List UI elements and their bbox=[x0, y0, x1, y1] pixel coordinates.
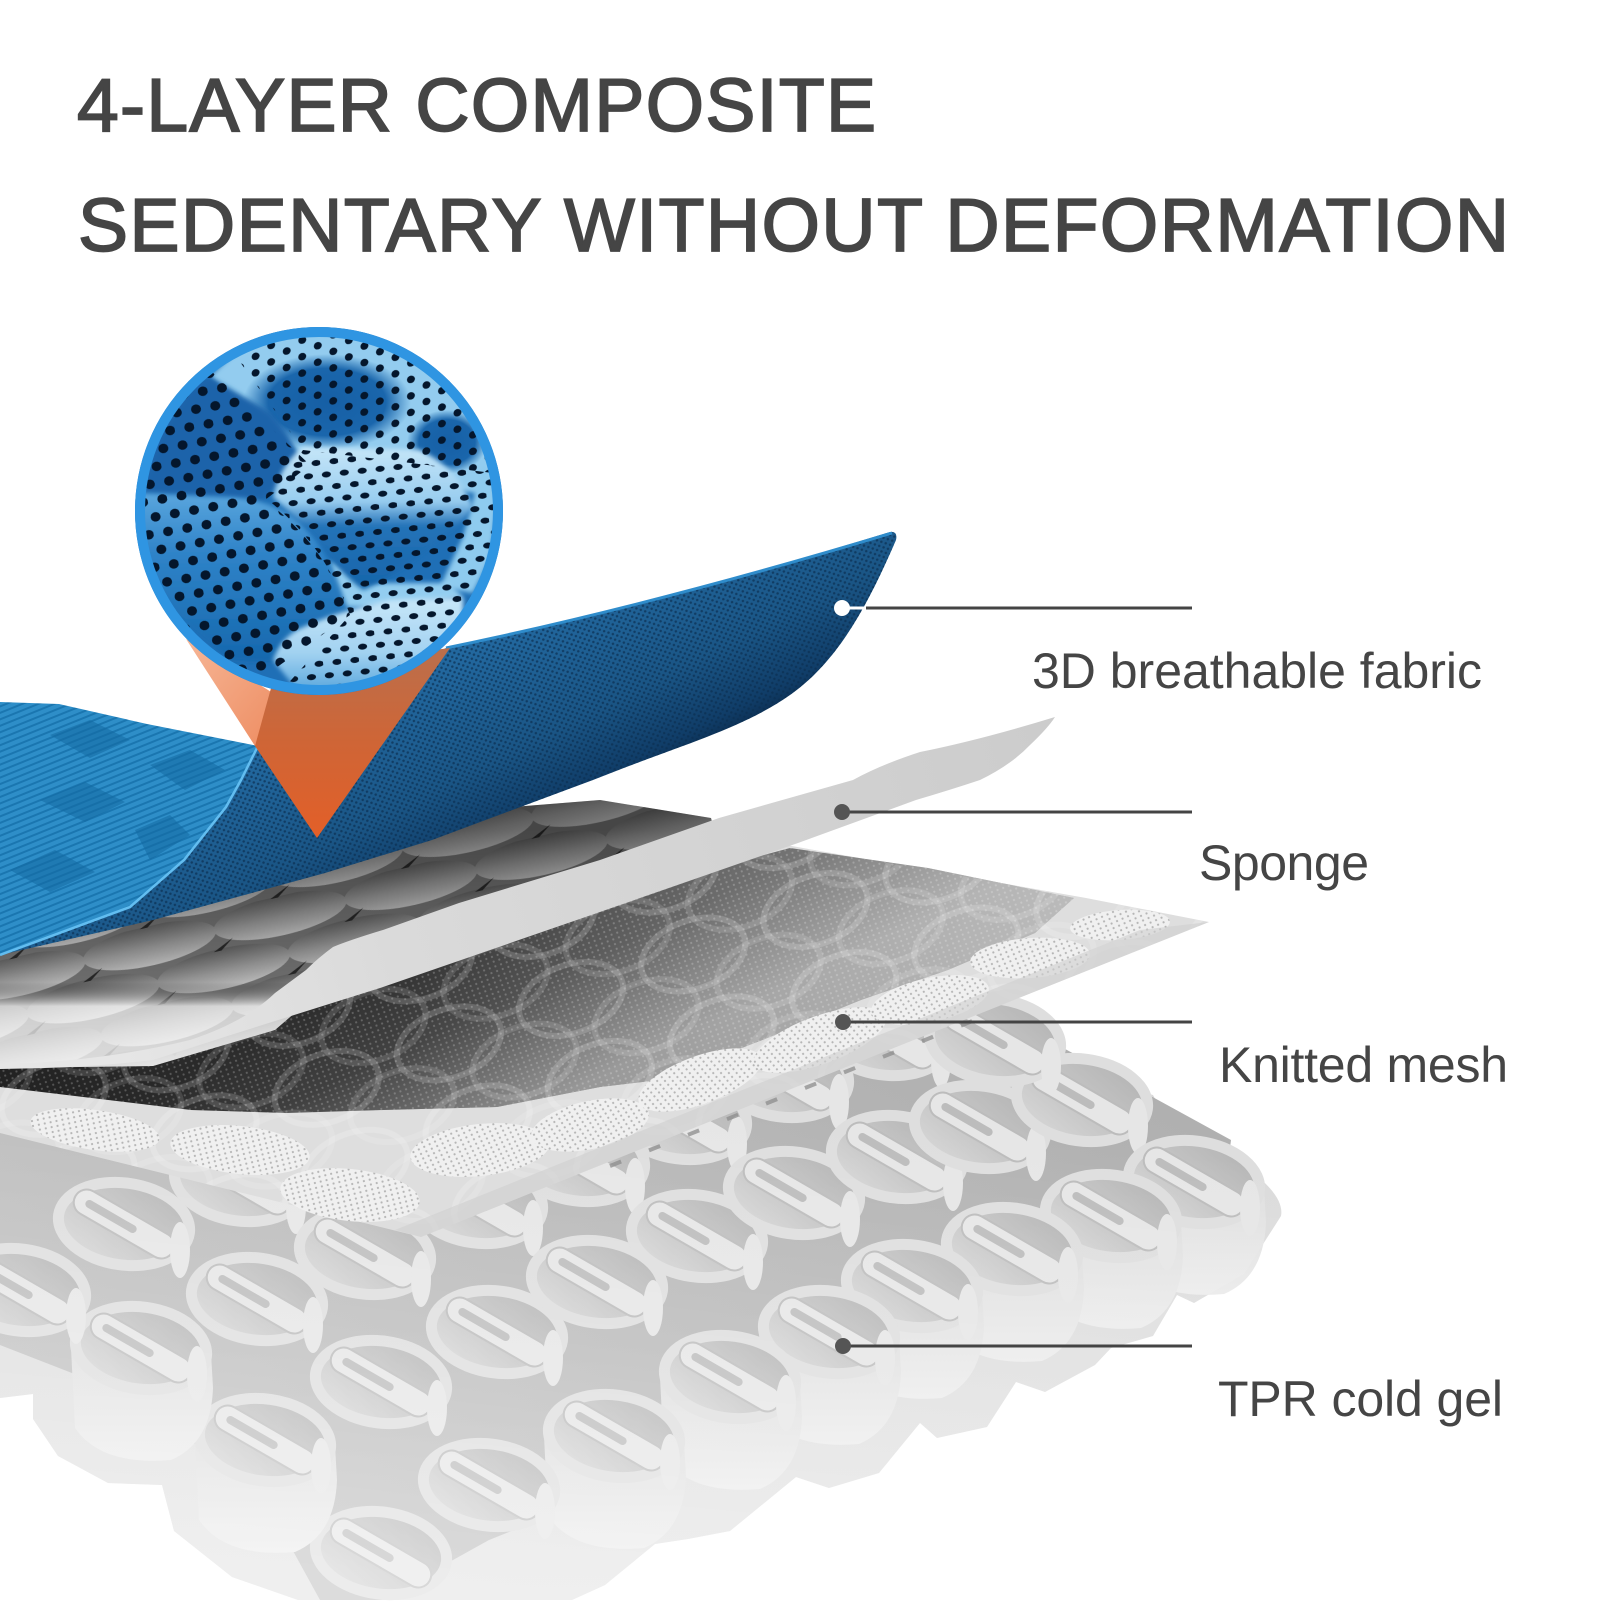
mesh sparkle weave on dark bbox=[0, 848, 1074, 1113]
label: 3D breathable fabric: 3D breathable fabric bbox=[1032, 643, 1482, 699]
leader: sponge bbox=[834, 804, 1192, 820]
fabric top face bbox=[0, 702, 258, 955]
fabric fold edge highlight bbox=[0, 746, 258, 955]
holes: top area bbox=[241, 337, 489, 472]
title: 4-LAYER COMPOSITE bbox=[77, 63, 876, 147]
sponge quilted surface bbox=[0, 800, 720, 1068]
left-upper dark fold bbox=[140, 377, 303, 500]
fabric flap edge highlight bbox=[446, 533, 892, 648]
leader: 3D breathable fabric bbox=[834, 600, 1192, 616]
holes: dark left side bbox=[145, 373, 350, 671]
gel outer scalloped silhouette bbox=[0, 1030, 1281, 1600]
label: TPR cold gel: TPR cold gel bbox=[1218, 1371, 1503, 1427]
left ball bbox=[140, 493, 347, 663]
sponge shading bbox=[0, 800, 720, 1068]
centre ball bbox=[273, 447, 473, 590]
top light band bbox=[210, 337, 491, 496]
mesh dark band lift bbox=[0, 848, 1074, 1113]
gel brightening toward front bbox=[0, 1030, 1281, 1600]
gel rail beside mesh edge bbox=[610, 1018, 980, 1166]
fabric flap weave bbox=[0, 532, 896, 955]
fabric top face diamonds bbox=[10, 720, 225, 892]
leader: knitted mesh bbox=[835, 1014, 1192, 1030]
right light strip bbox=[440, 486, 493, 596]
label: Sponge: Sponge bbox=[1199, 835, 1369, 891]
mesh transparent edge strip bbox=[395, 922, 1209, 1237]
mesh dark band bbox=[0, 848, 1074, 1113]
layer: knitted mesh bbox=[0, 845, 1209, 1237]
title bbox=[77, 63, 1509, 267]
layer: 3D breathable fabric bbox=[0, 532, 896, 955]
leader: TPR cold gel bbox=[835, 1338, 1192, 1354]
holes: centre and lower balls bbox=[272, 450, 493, 684]
light crossing band bbox=[330, 560, 463, 607]
bottom ball bbox=[273, 597, 463, 690]
circle ring bbox=[140, 332, 498, 690]
mesh light sheet bbox=[0, 845, 1209, 1237]
mesh textured blobs bbox=[28, 907, 1171, 1228]
layer: sponge bbox=[0, 717, 1055, 1069]
label: Knitted mesh: Knitted mesh bbox=[1219, 1037, 1508, 1093]
magnified fabric circle bbox=[130, 320, 510, 700]
mesh ring pattern bbox=[0, 845, 1209, 1237]
gel inner lattice floor bbox=[0, 1033, 1231, 1600]
callout pointer triangle bbox=[186, 639, 450, 838]
sponge light lip edge bbox=[0, 717, 1055, 1069]
title: SEDENTARY WITHOUT DEFORMATION bbox=[78, 183, 1509, 267]
layer: TPR cold gel bbox=[0, 984, 1281, 1601]
gel cells bbox=[0, 984, 1266, 1601]
fabric folded back flap bbox=[0, 532, 896, 955]
